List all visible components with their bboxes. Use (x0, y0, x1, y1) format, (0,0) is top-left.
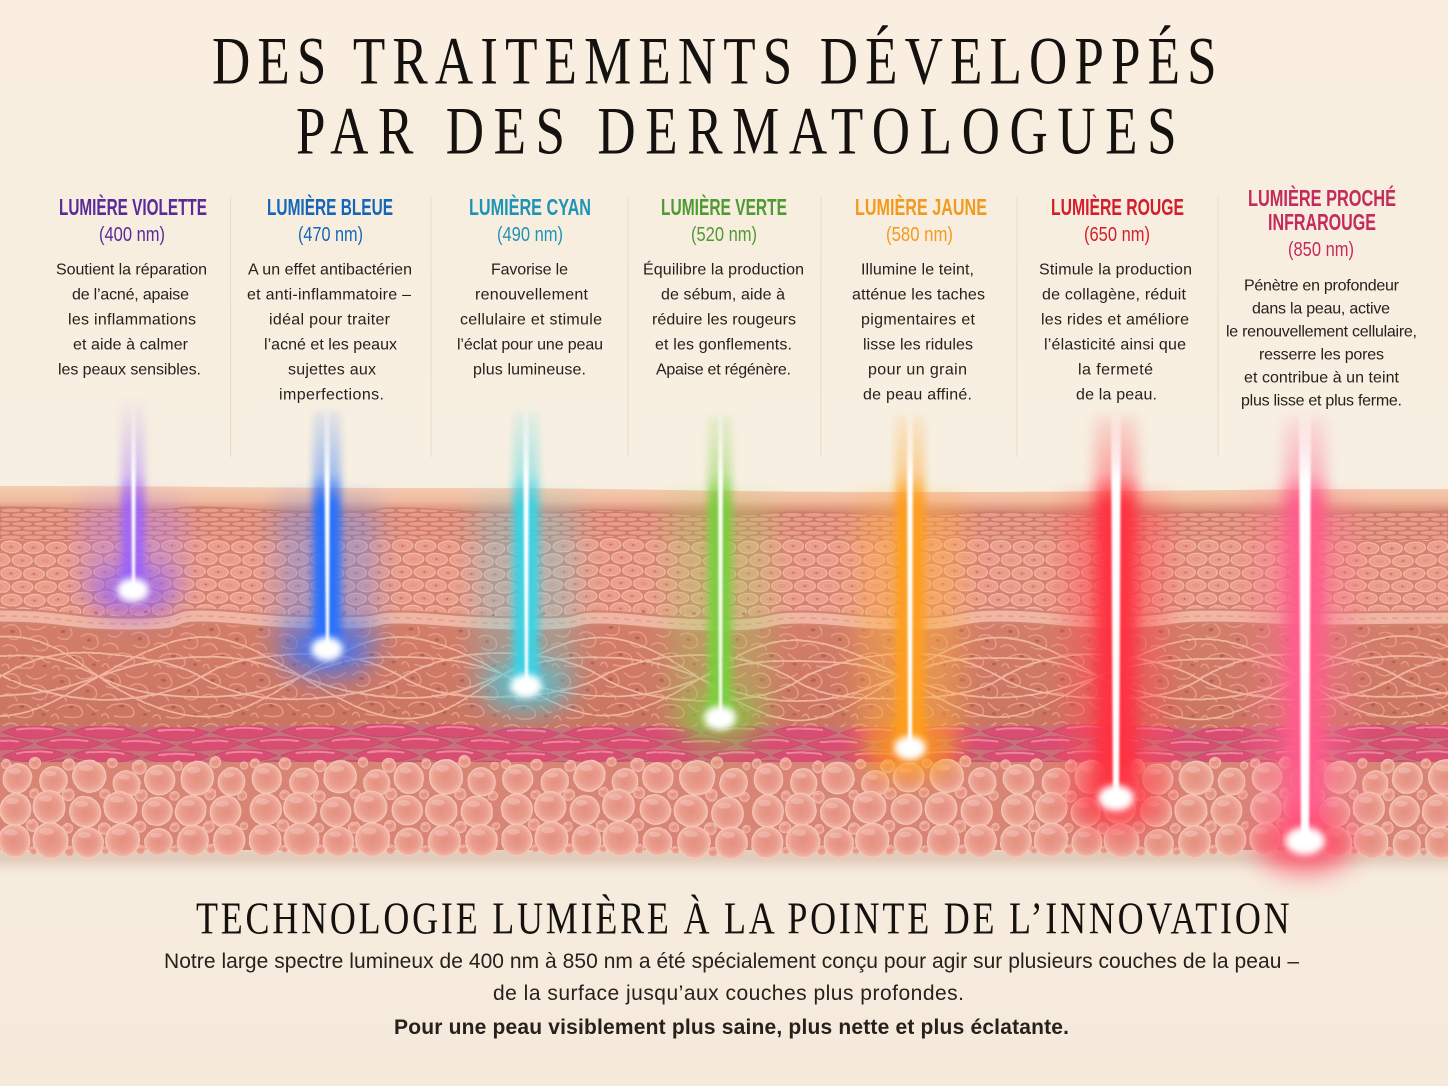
panel: near infrared light: plus lisse et plus ferme. (1241, 392, 1402, 410)
panel: green light (643, 193, 804, 378)
light beam: violet (83, 390, 183, 616)
light beam: near infrared (1255, 415, 1355, 871)
panel: cyan light: l’éclat pour une peau (457, 336, 603, 354)
surface layer (0, 486, 1448, 560)
stratified flat cell layer (0, 507, 1448, 560)
panel: blue light: LUMIÈRE BLEUE (267, 193, 393, 220)
panel: yellow light: atténue les taches (852, 286, 985, 304)
panel: blue light: et anti-inflammatoire – (247, 286, 411, 304)
panel: blue light (247, 193, 412, 404)
panel: cyan light (457, 193, 603, 378)
light beam: green (670, 415, 770, 744)
panel: green light: de sébum, aide à (661, 286, 785, 304)
panel: red light: Stimule la production (1039, 262, 1192, 278)
panel: yellow light: Illumine le teint, (861, 262, 974, 278)
panel: red light (1039, 193, 1192, 404)
panel: near infrared light: (850 nm) (1288, 239, 1354, 261)
light beam: red (1066, 415, 1166, 830)
panel: green light: (520 nm) (691, 224, 757, 246)
panel: blue light: l’acné et les peaux (264, 336, 397, 354)
footer text: de la surface jusqu’aux couches plus profondes. (493, 982, 964, 1005)
panel: green light: réduire les rougeurs (652, 312, 796, 328)
panel: yellow light (852, 193, 987, 404)
panel: green light: et les gonflements. (655, 336, 792, 354)
panel: yellow light: (580 nm) (886, 224, 953, 246)
title: PAR DES DERMATOLOGUES (296, 94, 1177, 169)
footer text: Notre large spectre lumineux de 400 nm à 850 nm a été spécialement conçu pour agir sur plusieurs couches de la peau – (164, 950, 1299, 973)
light beam: blue (277, 410, 377, 676)
fat base (0, 762, 1448, 850)
panel: blue light: imperfections. (279, 386, 384, 404)
panel: cyan light: Favorise le (491, 262, 568, 278)
panel: blue light: sujettes aux (288, 362, 376, 378)
panel: green light: Équilibre la production (643, 260, 804, 278)
panel: yellow light: lisse les ridules (863, 336, 973, 354)
panel: violet light: et aide à calmer (73, 336, 189, 354)
panel: near infrared light (1226, 184, 1417, 410)
panel: red light: de la peau. (1076, 386, 1157, 404)
shadow under skin (0, 850, 1448, 862)
light beam: yellow (860, 415, 960, 776)
panel: yellow light: de peau affiné. (863, 386, 972, 404)
panel: near infrared light: resserre les pores (1259, 346, 1384, 364)
panel: blue light: A un effet antibactérien (248, 262, 412, 278)
panel: red light: LUMIÈRE ROUGE (1051, 193, 1184, 220)
panel: red light: les rides et améliore (1041, 312, 1189, 328)
footer heading: TECHNOLOGIE LUMIÈRE À LA POINTE DE L’INNOVATION (196, 894, 1290, 943)
panel: green light: LUMIÈRE VERTE (661, 193, 787, 220)
fat bubbles (0, 752, 1448, 860)
panel: near infrared light: et contribue à un teint (1244, 370, 1400, 386)
panel: cyan light: cellulaire et stimule (460, 312, 602, 328)
footer text: Pour une peau visiblement plus saine, plus nette et plus éclatante. (394, 1016, 1069, 1039)
light beam: cyan (476, 410, 576, 712)
column dividers (230, 197, 1218, 457)
panel: cyan light: (490 nm) (497, 224, 563, 246)
muscle layer (0, 726, 1448, 768)
panel: red light: (650 nm) (1084, 224, 1150, 246)
dermis with collagen fibres (0, 612, 1448, 740)
panel: cyan light: LUMIÈRE CYAN (469, 193, 591, 220)
panel: violet light: Soutient la réparation (56, 262, 207, 278)
panel: red light: la fermeté (1078, 362, 1153, 378)
panel: red light: de collagène, réduit (1042, 286, 1187, 304)
panel: blue light: idéal pour traiter (269, 312, 391, 328)
panel: green light: Apaise et régénère. (656, 362, 791, 378)
panel: violet light: les inflammations (68, 312, 196, 328)
skin cross-section illustration (0, 486, 1448, 862)
panel: violet light (56, 193, 207, 378)
panel: violet light: (400 nm) (99, 224, 165, 246)
panel: cyan light: renouvellement (475, 286, 589, 304)
panel: cyan light: plus lumineuse. (473, 362, 586, 378)
panel: red light: l’élasticité ainsi que (1044, 336, 1186, 354)
basement membrane (0, 616, 1448, 625)
panel: near infrared light: le renouvellement cellulaire, (1226, 324, 1417, 340)
panel: near infrared light: Pénètre en profondeur (1244, 278, 1400, 294)
panel: yellow light: pigmentaires et (861, 312, 976, 328)
panel: violet light: les peaux sensibles. (58, 362, 201, 378)
panel: near infrared light: INFRAROUGE (1268, 209, 1376, 235)
panel: yellow light: pour un grain (868, 362, 967, 378)
panel: violet light: de l’acné, apaise (72, 286, 189, 304)
epidermis round cell layer (0, 539, 1448, 629)
panel: violet light: LUMIÈRE VIOLETTE (59, 193, 207, 220)
title (212, 24, 1217, 169)
panel: near infrared light: dans la peau, active (1252, 300, 1390, 318)
footer text (164, 950, 1299, 1039)
panel: blue light: (470 nm) (298, 224, 363, 246)
title: DES TRAITEMENTS DÉVELOPPÉS (212, 24, 1217, 99)
panel: yellow light: LUMIÈRE JAUNE (855, 193, 987, 220)
